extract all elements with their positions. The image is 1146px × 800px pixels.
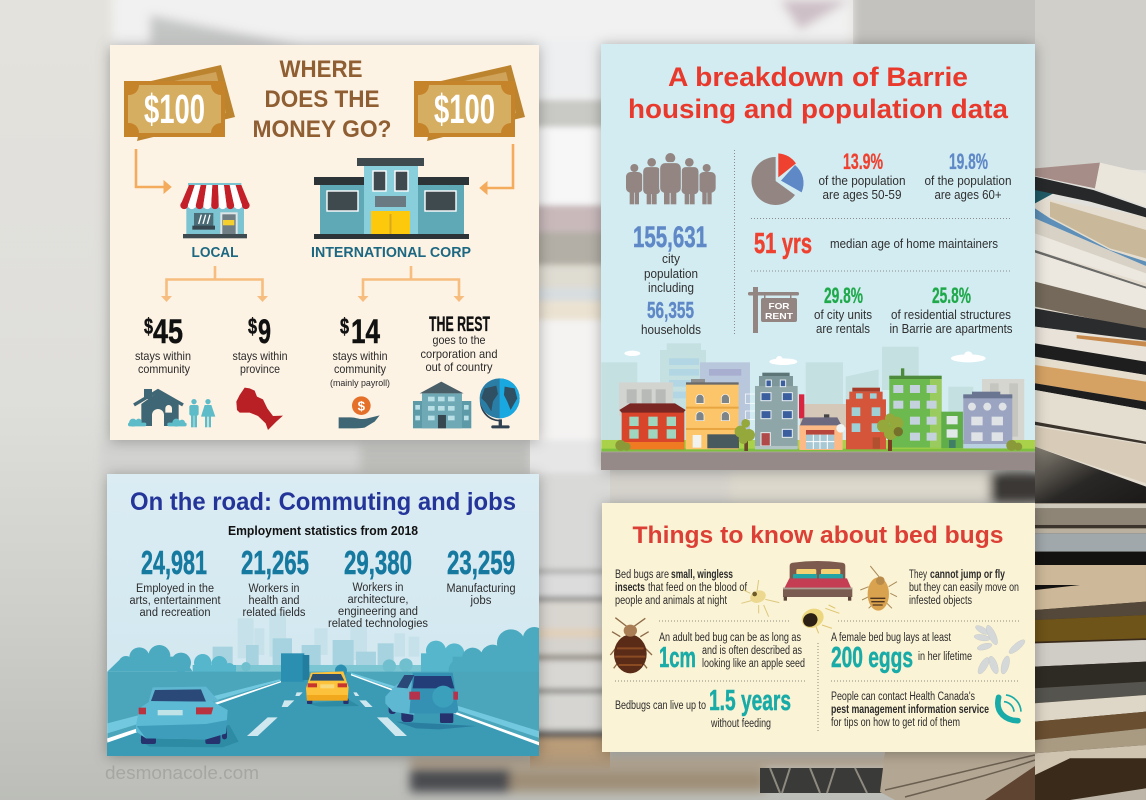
stat: arts jobs: Employed in the [136, 583, 214, 595]
stat: 14 dollars: $ [340, 314, 349, 339]
arrow: left bill to local [136, 149, 171, 193]
text: small wingless insects [615, 569, 748, 607]
stat: architecture jobs: 29,380 [344, 544, 412, 581]
stat: ages 60 plus: are ages 60+ [934, 188, 1002, 202]
title [252, 56, 392, 143]
stat: ages 50-59: are ages 50-59 [822, 188, 902, 202]
stat: 200 eggs: in her lifetime [918, 651, 972, 663]
arrow: corp split [358, 266, 464, 302]
stat: health jobs: Workers in [248, 583, 300, 595]
stat: ages 50-59: 13.9% [843, 149, 883, 174]
stat: 200 eggs: A female bed bug lays at least [831, 632, 952, 644]
text: pest management service: pest management information service [831, 704, 989, 716]
caption: households: households [641, 323, 701, 337]
SUV [385, 673, 476, 729]
caption: corporation: goes to the [432, 333, 486, 347]
stat: 1.5 years: Bedbugs can live up to [615, 700, 706, 712]
stat: rentals [814, 283, 872, 336]
title [628, 62, 1009, 124]
panel: Barrie housing and population data [600, 44, 1037, 471]
stat: architecture jobs: engineering and [338, 606, 418, 618]
text: small wingless insects: insects [615, 582, 645, 594]
label: local: LOCAL [192, 245, 239, 261]
stat: median age: median age of home maintainers [830, 237, 998, 251]
text: small wingless insects: Bed bugs are [615, 569, 669, 581]
caption: city population including: city [662, 252, 681, 266]
stat: manufacturing jobs: 23,259 [447, 544, 515, 581]
stat: ages 60 plus: of the population [924, 174, 1012, 188]
street trees [615, 413, 1022, 451]
stat: 9 dollars: $ [248, 314, 257, 339]
caption: local community: community [138, 362, 190, 376]
stat: health jobs: health and [248, 595, 300, 607]
stat: manufacturing jobs: Manufacturing [446, 583, 516, 595]
stat: ages 60 plus: 19.8% [949, 149, 988, 174]
stat: 1.5 years: 1.5 years [709, 685, 791, 717]
stat: architecture jobs: Workers in [352, 582, 404, 594]
icon: house and people [128, 389, 215, 427]
text: small wingless insects: that feed on the blood of [648, 582, 748, 594]
stat: architecture jobs: architecture, [348, 594, 408, 606]
stat: 9 dollars: 9 [258, 313, 271, 351]
caption: payroll: stays within [332, 349, 388, 363]
caption: province [232, 349, 288, 376]
blue-grey building [963, 392, 1012, 448]
text: pest management service: People can contact Health Canada's [831, 691, 975, 703]
watermark: desmonacole.com [105, 763, 259, 783]
stat: 1cm: An adult bed bug can be as long as [659, 632, 801, 644]
icon: yellow bed bug [798, 605, 839, 633]
stat: 1cm [659, 632, 805, 674]
stat: population: 155,631 [633, 221, 707, 254]
caption: corporation: corporation and [420, 347, 498, 361]
stat: health jobs [241, 544, 309, 619]
arrow: local split [161, 266, 268, 302]
stat: the rest: THE REST [429, 313, 490, 336]
stat: 45 dollars: 45 [153, 313, 183, 351]
truck [281, 653, 347, 682]
icon: pale bed bug [741, 580, 779, 617]
stat: 45 dollars [144, 313, 183, 351]
caption: payroll [330, 349, 390, 389]
stat: 9 dollars [248, 313, 271, 351]
text: cannot jump or fly: cannot jump or fly [930, 569, 1005, 581]
caption: corporation [420, 333, 498, 374]
title: MONEY GO? [252, 116, 392, 143]
stat: arts jobs [130, 544, 221, 619]
stat: health jobs: related fields [242, 607, 306, 619]
stat: rentals: are rentals [816, 322, 870, 336]
text: cannot jump or fly: infested objects [909, 595, 972, 607]
text: small wingless insects: people and animals at night [615, 595, 728, 607]
title: A breakdown of Barrie [668, 62, 968, 92]
brick house [619, 403, 686, 449]
stat: median age: 51 yrs [754, 228, 812, 260]
icon: Ontario map [236, 388, 283, 430]
stat: architecture jobs: related technologies [328, 618, 428, 630]
caption: local community [135, 349, 191, 376]
stat: 200 eggs: 200 eggs [831, 642, 913, 674]
caption: corporation: out of country [426, 360, 492, 374]
stat: manufacturing jobs [446, 544, 516, 607]
icon: local shop [180, 183, 250, 238]
blue car [136, 687, 239, 747]
pie chart [751, 153, 804, 205]
text: cannot jump or fly: They [909, 569, 927, 581]
illustration: city street [600, 343, 1037, 471]
icon: phone [998, 695, 1021, 721]
text: small wingless insects: small, wingless [671, 569, 733, 581]
stat: rentals: of city units [814, 308, 872, 322]
stat: architecture jobs [328, 544, 428, 630]
yellow building [686, 379, 739, 449]
panel: bed bugs [602, 503, 1035, 752]
caption: city population including: including [648, 281, 694, 295]
stat: ages 60 plus [924, 149, 1012, 202]
stat: 45 dollars: $ [144, 314, 153, 339]
icon: tan bed bug [860, 566, 897, 611]
stat: manufacturing jobs: jobs [470, 595, 492, 607]
road illustration [106, 613, 546, 757]
icon: for rent sign: RENT [765, 311, 794, 321]
caption: province: province [240, 362, 280, 376]
title: DOES THE [264, 86, 380, 113]
stat: arts jobs: 24,981 [141, 544, 207, 581]
arrow: right bill to corp [480, 144, 513, 194]
stat: 1cm: looking like an apple seed [702, 658, 805, 670]
stat: apartments [890, 283, 1012, 336]
stat: 1cm: 1cm [659, 642, 696, 674]
title: On the road: Commuting and jobs [130, 488, 516, 516]
stat: 1.5 years [615, 685, 791, 730]
stat: households: 56,355 [647, 297, 694, 323]
text: cannot jump or fly: but they can easily move on [909, 582, 1019, 594]
caption: city population including: population [644, 267, 698, 281]
stat: apartments: of residential structures [891, 308, 1011, 322]
stat: 1cm: and is often described as [702, 645, 802, 657]
title: Things to know about bed bugs [632, 522, 1004, 549]
caption: local community: stays within [135, 349, 191, 363]
icon: right 100 dollar bill: $100 [434, 86, 495, 132]
icon: brown bed bug [610, 618, 652, 673]
text: pest management service: for tips on how to get rid of them [831, 717, 960, 729]
icon: eggs [974, 624, 1027, 676]
text: cannot jump or fly [909, 569, 1019, 607]
subtitle: Employment statistics from 2018 [228, 523, 418, 538]
stat: apartments: in Barrie are apartments [890, 322, 1012, 336]
icon: hand with coin [339, 396, 380, 428]
icon: international corp building [314, 158, 469, 239]
title: housing and population data [628, 94, 1009, 124]
caption: payroll: community [334, 362, 386, 376]
stat: arts jobs: and recreation [140, 607, 210, 619]
icon: for rent sign [748, 287, 799, 333]
yellow car [306, 671, 359, 707]
icon: hotel building [413, 382, 471, 428]
icon: globe [480, 378, 520, 428]
green tower [889, 368, 963, 448]
icon: left 100 dollar bill [124, 65, 235, 141]
label: international corp: INTERNATIONAL CORP [311, 245, 471, 261]
icon: right 100 dollar bill [414, 65, 525, 141]
stat: rentals: 29.8% [824, 283, 863, 308]
icon: hand with coin: $ [358, 398, 366, 413]
icon: left 100 dollar bill: $100 [144, 86, 205, 132]
title: WHERE [280, 56, 362, 83]
text: pest management service [831, 691, 989, 729]
stat: ages 50-59 [818, 149, 906, 202]
panel: commuting and jobs [106, 474, 546, 757]
stat: arts jobs: arts, entertainment [130, 595, 221, 607]
caption: city population including [644, 252, 698, 295]
stat: ages 50-59: of the population [818, 174, 906, 188]
stat: 14 dollars [340, 313, 380, 351]
stat: median age [754, 228, 998, 260]
stat: apartments: 25.8% [932, 283, 971, 308]
panel: where does the money go [110, 45, 539, 440]
icon: group of people [626, 153, 716, 204]
caption: province: stays within [232, 349, 288, 363]
stat: 14 dollars: 14 [351, 313, 380, 351]
icon: bed [783, 561, 852, 601]
red brick tower [846, 388, 886, 449]
icon: for rent sign: FOR [768, 301, 790, 311]
shop building [799, 414, 845, 450]
stat: 200 eggs [831, 632, 972, 674]
stat: 1.5 years: without feeding [710, 718, 771, 730]
grey apartment tower [755, 373, 798, 449]
caption: payroll: (mainly payroll) [330, 378, 390, 389]
stat: health jobs: 21,265 [241, 544, 309, 581]
